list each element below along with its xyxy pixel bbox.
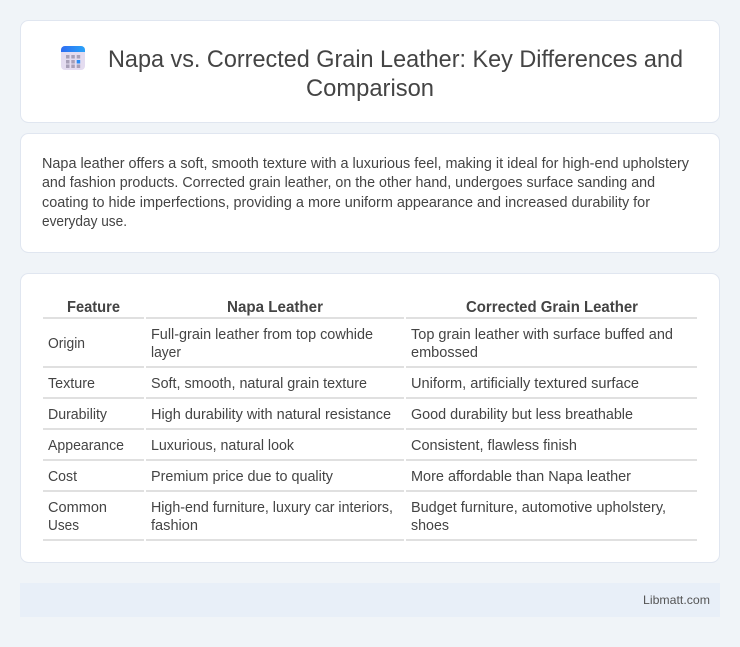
title: Comparison xyxy=(306,75,434,102)
table row: appearance: Appearance xyxy=(48,438,124,454)
panel: title header xyxy=(20,20,720,122)
table row: common uses: Common xyxy=(48,500,107,516)
table row: durability: Good durability but less breathable xyxy=(411,407,633,423)
table row: texture xyxy=(43,376,697,399)
footer xyxy=(20,583,720,617)
icon: calendar xyxy=(61,46,85,70)
table row: durability xyxy=(43,407,697,430)
text block: summary paragraph: and fashion products. Corrected grain leather, on the other hand, undergoes surface sanding and xyxy=(42,175,655,191)
text block: summary paragraph: coating to hide imperfections, providing a more uniform appearance and increased durability for xyxy=(42,195,650,211)
table row: texture: Soft, smooth, natural grain texture xyxy=(151,376,367,392)
text block: summary paragraph: everyday use. xyxy=(42,214,127,230)
table header row: Feature xyxy=(67,299,120,316)
table row: origin xyxy=(43,327,697,368)
table row: cost: Cost xyxy=(48,469,77,485)
table row: common uses: shoes xyxy=(411,518,449,534)
table row: texture: Uniform, artificially textured surface xyxy=(411,376,639,392)
table header row: Corrected Grain Leather xyxy=(466,299,638,316)
table row: appearance: Luxurious, natural look xyxy=(151,438,295,454)
table row: appearance xyxy=(43,438,697,461)
table header row xyxy=(43,299,697,319)
text block: summary paragraph xyxy=(42,156,690,230)
table row: common uses: Uses xyxy=(48,518,79,534)
table row: durability: High durability with natural resistance xyxy=(151,407,391,423)
table row: origin: Top grain leather with surface buffed and xyxy=(411,327,673,343)
table row: durability: Durability xyxy=(48,407,108,423)
table row: cost: Premium price due to quality xyxy=(151,469,334,485)
table row: appearance: Consistent, flawless finish xyxy=(411,438,577,454)
table row: texture: Texture xyxy=(48,376,95,392)
text block: summary paragraph: Napa leather offers a soft, smooth texture with a luxurious feel, making it ideal for high-end upholstery xyxy=(42,156,690,172)
table row: origin: embossed xyxy=(411,345,478,361)
panel: comparison table xyxy=(20,274,720,562)
footer: Libmatt.com xyxy=(643,593,710,607)
table row: common uses: Budget furniture, automotive upholstery, xyxy=(411,500,666,516)
panel: introduction xyxy=(20,134,720,252)
table row: origin: Full-grain leather from top cowhide xyxy=(151,327,373,343)
table row: cost: More affordable than Napa leather xyxy=(411,469,631,485)
table row: cost xyxy=(43,469,697,492)
title xyxy=(108,46,683,102)
table header row: Napa Leather xyxy=(227,299,323,316)
table row: common uses xyxy=(43,500,697,541)
title: Napa vs. Corrected Grain Leather: Key Differences and xyxy=(108,46,683,73)
table row: origin: layer xyxy=(151,345,181,361)
table row: common uses: High-end furniture, luxury car interiors, xyxy=(151,500,393,516)
table row: common uses: fashion xyxy=(151,518,198,534)
table row: origin: Origin xyxy=(48,336,85,352)
